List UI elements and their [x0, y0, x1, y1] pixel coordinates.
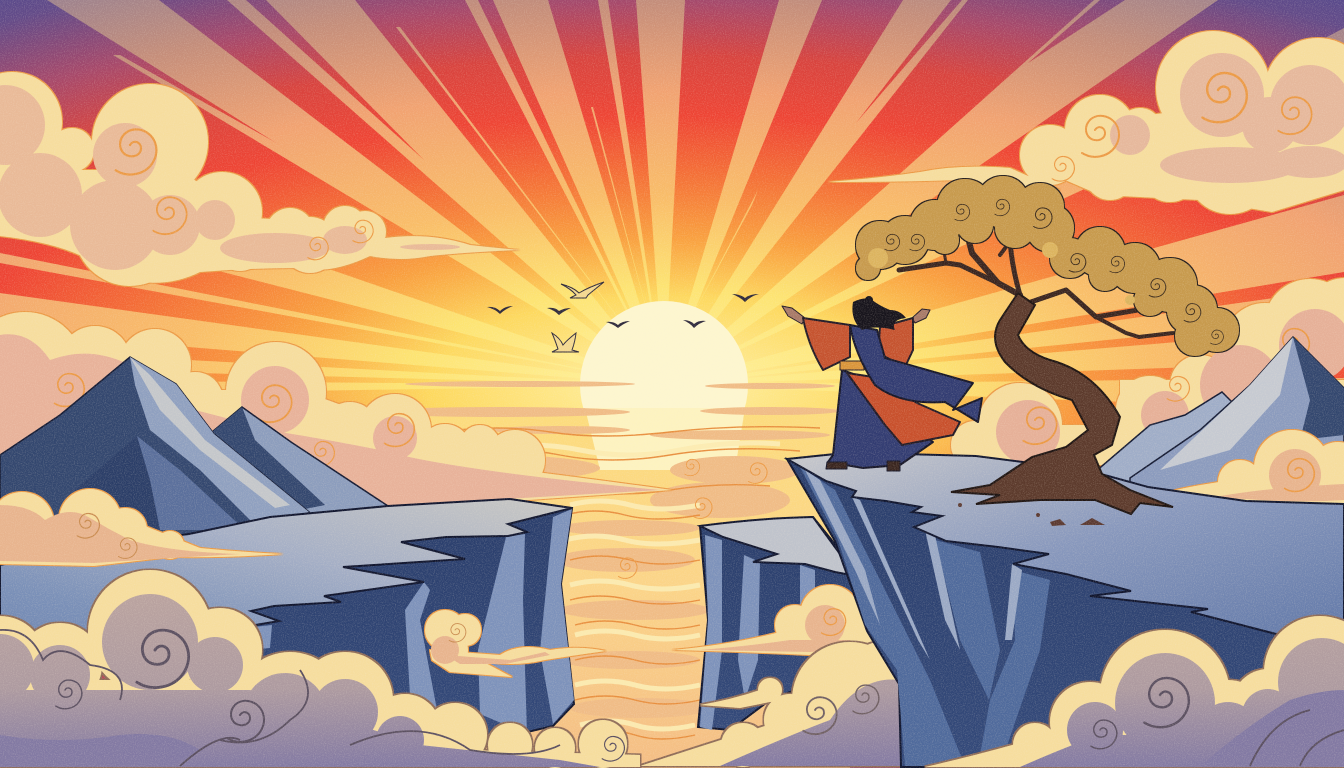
bird 5	[606, 321, 630, 328]
bird 3	[547, 308, 571, 315]
bird 7	[732, 294, 759, 302]
sun reflection bands	[585, 408, 745, 470]
cloud: upper left	[0, 72, 520, 286]
foreground cloud shadow	[0, 734, 200, 767]
cliff face	[787, 459, 1300, 767]
cliff facets	[244, 509, 574, 734]
cloud: right behind mountains	[951, 278, 1344, 470]
tree	[856, 176, 1239, 514]
cloud: over middle cliff	[672, 585, 882, 655]
cloud: foreground bottom left	[0, 570, 640, 768]
cliff face	[230, 508, 574, 740]
hands	[782, 306, 930, 324]
tree foliage	[856, 176, 1239, 356]
red flowing panel	[847, 373, 960, 445]
bird 1	[487, 306, 513, 314]
cliff facets	[800, 467, 1050, 766]
back peak	[212, 407, 388, 515]
foliage swirls	[885, 199, 1223, 344]
head and hair	[852, 298, 906, 330]
middle cliff	[698, 517, 870, 730]
bird 4	[552, 333, 579, 352]
cloud: chasm wisp	[425, 610, 606, 677]
left cliff	[0, 499, 574, 740]
birds	[487, 282, 759, 352]
navy cape	[850, 325, 982, 422]
main peak	[0, 357, 309, 535]
sea of clouds in the chasm	[340, 381, 850, 768]
rocks on cliff	[958, 503, 1105, 526]
navy skirt	[828, 370, 933, 468]
cloud: foreground bottom center	[640, 642, 908, 767]
hair bun	[865, 296, 873, 304]
sun	[580, 301, 748, 469]
dark wedges inside rays	[246, 0, 1344, 340]
left sleeve	[803, 318, 850, 370]
bird 6	[683, 320, 706, 328]
bird 2	[561, 282, 604, 298]
cloud: upper right	[828, 31, 1344, 214]
tree trunk and roots	[951, 293, 1173, 514]
mountains: right range	[1095, 337, 1344, 510]
cloud: small right low	[1168, 430, 1344, 506]
cliff top surface	[0, 499, 572, 650]
cliff top surface	[787, 454, 1344, 634]
right sleeve	[878, 318, 913, 367]
cloud: left mid low	[0, 489, 283, 566]
mountains: left range	[0, 357, 388, 535]
cloud: middle left behind mountains	[0, 312, 672, 510]
tree branches	[899, 215, 1173, 337]
sun rays	[0, 0, 1344, 410]
right cliff	[787, 454, 1344, 767]
figure in flowing robe	[782, 296, 982, 471]
feet	[826, 461, 900, 471]
foliage highlights	[868, 242, 1135, 305]
belt	[840, 361, 864, 370]
cloud: foreground bottom right	[925, 616, 1344, 767]
foreground cloud shadow	[1200, 690, 1344, 767]
